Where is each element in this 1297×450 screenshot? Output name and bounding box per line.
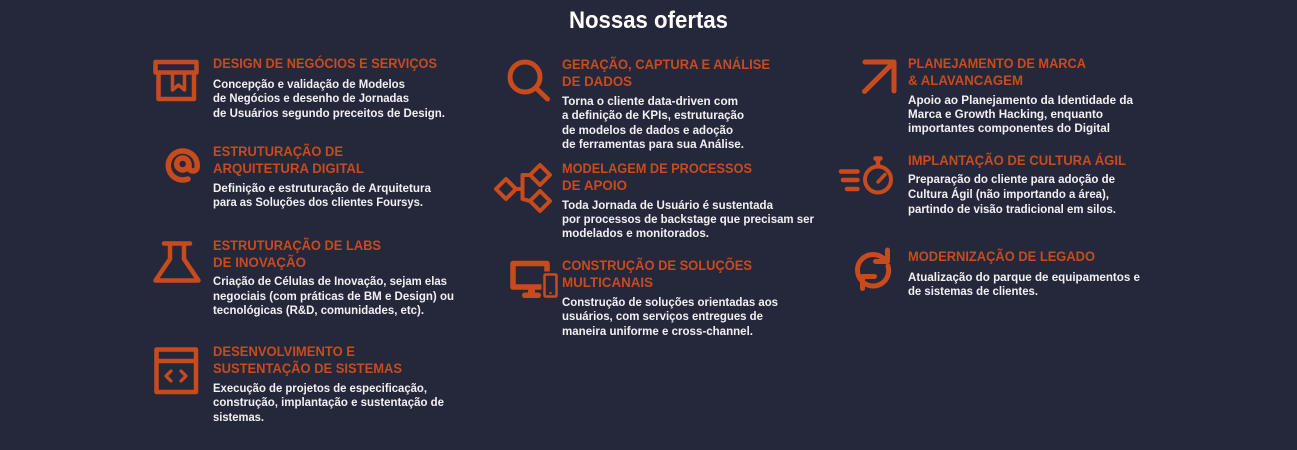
heading: [213, 144, 364, 176]
text block: a definição de KPIs, estruturação: [562, 110, 744, 122]
heading: [213, 344, 402, 376]
text block: [562, 96, 744, 151]
text block: [908, 95, 1134, 135]
heading: [562, 258, 752, 290]
text block: construção, implantação e sustentação de: [213, 397, 444, 409]
text block: Apoio ao Planejamento da Identidade da: [908, 95, 1134, 107]
text block: Criação de Células de Inovação, sejam elas: [213, 276, 447, 288]
text block: [562, 297, 778, 338]
text block: Atualização do parque de equipamentos e: [908, 272, 1140, 284]
heading: PLANEJAMENTO DE MARCA: [908, 56, 1086, 71]
text block: [213, 79, 445, 120]
panel: labs de inovação: [156, 238, 454, 317]
heading: MULTICANAIS: [562, 275, 653, 290]
text block: de sistemas de clientes.: [908, 286, 1038, 298]
panel: modelagem de processos: [496, 161, 815, 240]
heading: MODERNIZAÇÃO DE LEGADO: [908, 249, 1095, 264]
heading: ESTRUTURAÇÃO DE: [213, 144, 343, 159]
text block: modelados e monitorados.: [562, 228, 709, 240]
heading: [213, 238, 381, 270]
text block: Definição e estruturação de Arquitetura: [213, 183, 432, 195]
text block: Concepção e validação de Modelos: [213, 79, 405, 91]
heading: & ALAVANCAGEM: [908, 73, 1023, 88]
heading: DE INOVAÇÃO: [213, 255, 306, 270]
text block: de modelos de dados e adoção: [562, 125, 733, 137]
text block: Toda Jornada de Usuário é sustentada: [562, 200, 774, 212]
heading: ARQUITETURA DIGITAL: [213, 161, 364, 176]
text block: Marca e Growth Hacking, enquanto: [908, 109, 1103, 121]
text block: maneira uniforme e cross-channel.: [562, 326, 753, 338]
heading: [562, 161, 752, 193]
heading: [908, 56, 1086, 88]
text block: Torna o cliente data-driven com: [562, 96, 738, 108]
text block: por processos de backstage que precisam ser: [562, 214, 815, 226]
heading: CONSTRUÇÃO DE SOLUÇÕES: [562, 258, 752, 273]
icon: process diagram: [496, 165, 550, 211]
text block: Construção de soluções orientadas aos: [562, 297, 778, 309]
heading: DE DADOS: [562, 74, 632, 89]
text block: [213, 276, 454, 317]
text block: [213, 383, 444, 424]
heading: SUSTENTAÇÃO DE SISTEMAS: [213, 361, 402, 376]
panel: arquitetura digital: [168, 144, 432, 209]
text block: partindo de visão tradicional em silos.: [908, 204, 1116, 216]
icon: flask: [156, 244, 198, 280]
heading: DESENVOLVIMENTO E: [213, 344, 355, 359]
text block: [908, 272, 1140, 298]
heading: [562, 57, 770, 89]
heading: IMPLANTAÇÃO DE CULTURA ÁGIL: [908, 153, 1126, 168]
icon: magnifier: [510, 62, 548, 99]
heading: DESIGN DE NEGÓCIOS E SERVIÇOS: [213, 56, 437, 71]
text block: Cultura Ágil (não importando a área),: [908, 188, 1109, 201]
panel: geração, captura e análise: [510, 57, 770, 151]
panel: modernização de legado: [857, 249, 1140, 298]
text block: importantes componentes do Digital: [908, 123, 1110, 135]
panel: desenvolvimento e sustentação: [156, 344, 444, 424]
text block: [908, 174, 1116, 216]
title: Nossas ofertas: [569, 7, 728, 34]
text block: de ferramentas para sua Análise.: [562, 139, 744, 151]
text block: tecnológicas (R&D, comunidades, etc).: [213, 305, 424, 317]
icon: code window: [156, 350, 196, 392]
icon: arrow up right: [864, 62, 894, 92]
icon: stopwatch: [841, 158, 891, 192]
heading: GERAÇÃO, CAPTURA E ANÁLISE: [562, 57, 770, 72]
text block: de Usuários segundo preceitos de Design.: [213, 108, 445, 120]
text block: usuários, com serviços entregues de: [562, 311, 763, 323]
icon: monitor and phone: [513, 264, 560, 300]
heading: DE APOIO: [562, 178, 627, 193]
text block: sistemas.: [213, 412, 264, 424]
icon: refresh: [857, 250, 889, 288]
heading: MODELAGEM DE PROCESSOS: [562, 161, 752, 176]
panel: planejamento de marca: [864, 56, 1134, 135]
text block: [562, 200, 815, 240]
text block: negociais (com práticas de BM e Design) ou: [213, 291, 454, 303]
text block: de Negócios e desenho de Jornadas: [213, 93, 409, 105]
panel: soluções multicanais: [513, 258, 778, 338]
text block: [213, 183, 432, 209]
text block: para as Soluções dos clientes Foursys.: [213, 197, 423, 209]
icon: at sign: [168, 151, 197, 180]
heading: ESTRUTURAÇÃO DE LABS: [213, 238, 381, 253]
icon: box: [156, 62, 196, 99]
text block: Preparação do cliente para adoção de: [908, 174, 1115, 186]
panel: cultura ágil: [841, 153, 1126, 216]
text block: Execução de projetos de especificação,: [213, 383, 427, 395]
panel: design de negócios e serviços: [156, 56, 445, 120]
